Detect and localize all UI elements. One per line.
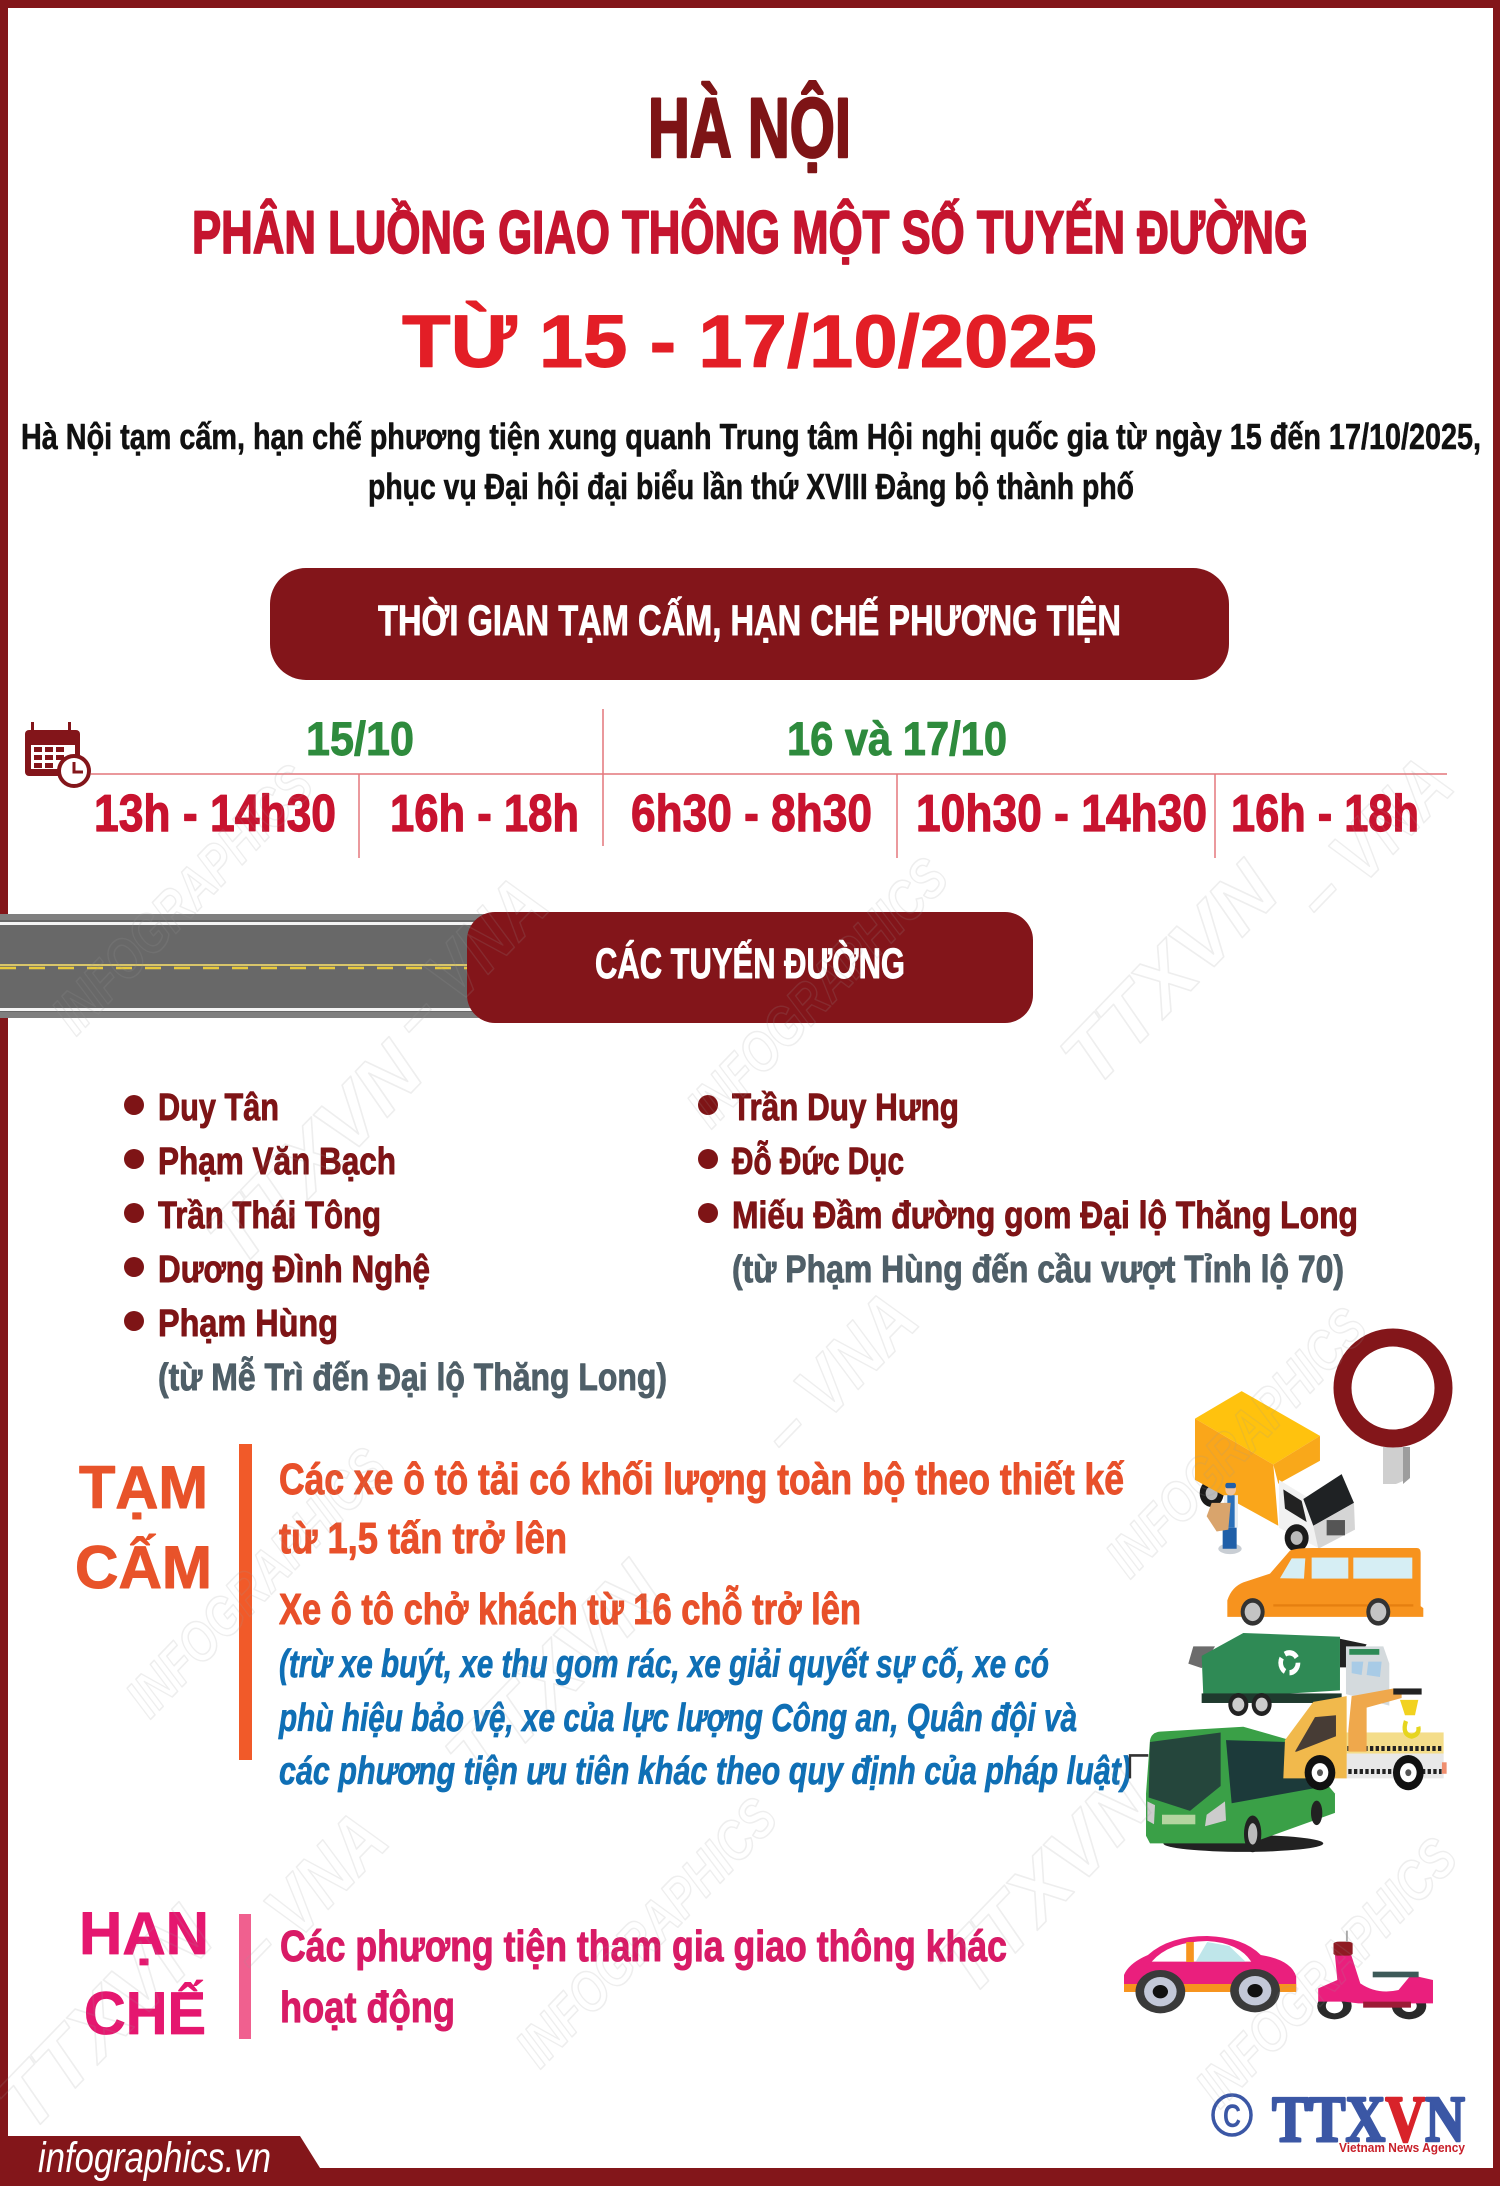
exceptions text: (trừ xe buýt, xe thu gom rác, xe giải quyết sự cố, xe có — [279, 1643, 1049, 1686]
route list: left column: Phạm Văn Bạch — [158, 1141, 396, 1183]
restricted vehicles text: hoạt động — [280, 1983, 455, 2032]
watermark pattern: – VNA — [211, 1796, 404, 1992]
road graphic — [0, 914, 490, 1018]
icon: calendar with clock — [25, 722, 89, 786]
time slots: 13h - 14h30 — [94, 785, 336, 843]
label: Tạm cấm: TẠM — [79, 1454, 208, 1521]
heading pill: restriction times — [270, 568, 1229, 680]
route list: right column: Trần Duy Hưng — [732, 1087, 959, 1129]
restricted vehicles text: Các phương tiện tham gia giao thông khác — [280, 1922, 1007, 1971]
watermark pattern: INFOGRAPHICS — [1093, 1296, 1379, 1588]
banned vehicles text: Xe ô tô chở khách từ 16 chỗ trở lên — [279, 1584, 861, 1634]
icon: delivery truck — [1195, 1391, 1355, 1554]
copyright mark — [1213, 2095, 1251, 2135]
restricted vehicles text — [280, 1922, 1007, 2032]
watermark pattern: INFOGRAPHICS — [674, 846, 960, 1138]
logo: TTXVN: TTXVN — [1272, 2083, 1465, 2156]
icon: pink car — [1124, 1936, 1296, 2013]
label: Tạm cấm — [75, 1454, 212, 1601]
watermark pattern: TTXVN — [188, 1024, 441, 1282]
route list: left column — [124, 1087, 667, 1399]
date heading: TỪ 15 - 17/10/2025 — [402, 300, 1097, 383]
route list: left column: Trần Thái Tông — [158, 1195, 381, 1237]
banned vehicles text: từ 1,5 tấn trở lên — [279, 1514, 567, 1563]
route list: right column: (từ Phạm Hùng đến cầu vượt Tỉnh lộ 70) — [732, 1249, 1344, 1291]
route list: left column: Phạm Hùng — [158, 1303, 338, 1345]
icon: garbage truck — [1188, 1633, 1389, 1716]
watermark pattern: INFOGRAPHICS — [39, 753, 325, 1045]
icon: pink scooter — [1317, 1931, 1433, 2019]
bottom bar — [0, 2168, 1500, 2186]
watermark pattern: INFOGRAPHICS — [113, 1436, 399, 1728]
time slots: 16h - 18h — [1231, 785, 1419, 843]
exceptions text — [278, 1643, 1131, 1793]
icon: vehicles group — [1130, 1391, 1447, 1852]
watermark pattern: TTXVN — [918, 1754, 1171, 2012]
logo: TTXVN: Vietnam News Agency — [1339, 2140, 1466, 2155]
route list: left column: Dương Đình Nghệ — [158, 1249, 430, 1291]
icon: prohibition sign — [1342, 1338, 1444, 1484]
label: Hạn chế: HẠN — [79, 1900, 209, 1967]
date label: 16 and 17/10: 16 và 17/10 — [787, 712, 1007, 765]
exceptions text: các phương tiện ưu tiên khác theo quy định của pháp luật) — [279, 1750, 1131, 1793]
time slots: 10h30 - 14h30 — [916, 785, 1207, 843]
watermark pattern: – VNA — [1276, 741, 1469, 937]
source tab: infographics.vn: infographics.vn — [38, 2134, 271, 2182]
watermark pattern: TTXVN — [1043, 844, 1296, 1102]
schedule table — [91, 709, 1447, 858]
icon: green bus — [1130, 1727, 1335, 1852]
title: Hà Nội: HÀ NỘI — [648, 81, 851, 175]
watermark pattern — [0, 741, 1469, 2147]
icon: orange van — [1227, 1548, 1423, 1626]
exceptions text: phù hiệu bảo vệ, xe của lực lượng Công an, Quân đội và — [278, 1697, 1077, 1740]
heading pill: routes — [467, 912, 1033, 1023]
route list: right column: Miếu Đầm đường gom Đại lộ Thăng Long — [732, 1195, 1358, 1237]
route list: left column: Duy Tân — [158, 1087, 279, 1129]
route list: right column: Đỗ Đức Dục — [732, 1139, 904, 1183]
route list: right column — [698, 1087, 1358, 1291]
intro paragraph: phục vụ Đại hội đại biểu lần thứ XVIII Đảng bộ thành phố — [368, 466, 1134, 507]
section: restricted — [79, 1900, 1007, 2047]
heading pill: restriction times: THỜI GIAN TẠM CẤM, HẠN CHẾ PHƯƠNG TIỆN — [378, 596, 1121, 645]
icon: car and scooter — [1124, 1931, 1433, 2019]
route list: left column: (từ Mễ Trì đến Đại lộ Thăng Long) — [158, 1355, 667, 1399]
label: Hạn chế — [79, 1900, 209, 2047]
banned vehicles text: Các xe ô tô tải có khối lượng toàn bộ theo thiết kế — [279, 1455, 1124, 1504]
date label: 15/10: 15/10 — [306, 712, 414, 765]
title block — [192, 81, 1308, 383]
watermark pattern: – VNA — [741, 1276, 934, 1472]
watermark pattern: INFOGRAPHICS — [503, 1786, 789, 2078]
heading pill: routes: CÁC TUYẾN ĐƯỜNG — [595, 939, 905, 988]
time slots — [94, 785, 1419, 843]
label: Hạn chế: CHẾ — [84, 1980, 206, 2047]
time slots: 16h - 18h — [390, 785, 579, 843]
watermark pattern: – VNA — [371, 861, 564, 1057]
watermark pattern: TTXVN — [428, 1544, 681, 1802]
copyright mark: C — [1223, 2098, 1241, 2134]
banned vehicles text — [279, 1455, 1124, 1634]
label: Tạm cấm: CẤM — [75, 1534, 212, 1601]
time slots: 6h30 - 8h30 — [631, 785, 872, 843]
intro paragraph — [21, 416, 1481, 507]
section: temporary ban — [75, 1444, 1131, 1793]
icon: tow truck — [1283, 1688, 1447, 1790]
